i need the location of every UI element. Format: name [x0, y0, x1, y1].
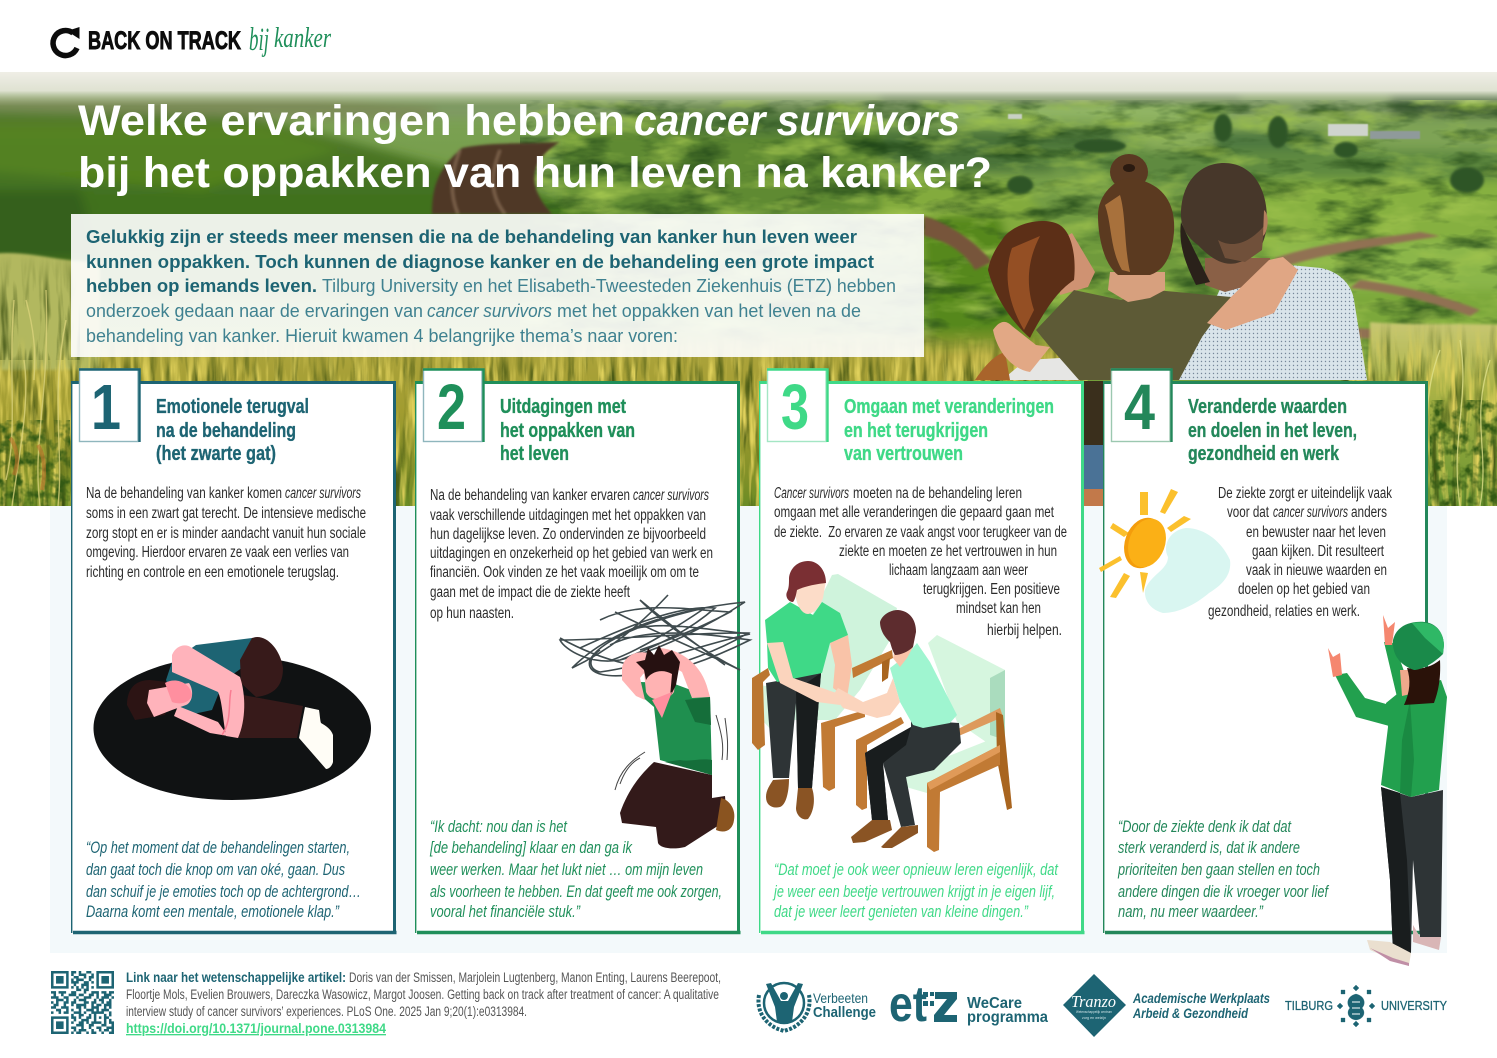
gap behind cards: clothing	[1084, 381, 1103, 506]
number 4: 4	[1124, 371, 1155, 443]
logo: Tranzo Academische Werkplaats: Wetenschappelijk centrum	[1076, 1009, 1113, 1014]
dirt road	[432, 142, 1497, 341]
reference text: interview study of cancer survivors’ experiences. PLoS One. 2025 Jan 9;20(1):e0313984.	[126, 1004, 527, 1019]
body text 1: cancer survivors	[285, 485, 361, 502]
body text 2	[430, 487, 713, 622]
heading 2: Uitdagingen met	[500, 396, 626, 418]
reference text	[126, 970, 721, 1036]
panel: introduction: Gelukkig zijn er steeds meer mensen die na de behandeling van kanker hun leven weer	[86, 227, 857, 247]
body text 3: moeten na de behandeling leren	[853, 485, 1022, 502]
logo: ETZ WeCare programma: WeCare	[967, 995, 1022, 1012]
body text 3: lichaam langzaam aan weer	[889, 562, 1028, 579]
card frame 2	[415, 381, 740, 934]
quote 2	[429, 817, 722, 921]
heading 2: het oppakken van	[500, 420, 635, 442]
heading 3: en het terugkrijgen	[844, 420, 988, 442]
logo: ETZ WeCare programma: et	[889, 976, 927, 1032]
QR code	[51, 971, 114, 1034]
logo: ETZ WeCare programma	[889, 976, 1048, 1032]
body text 2: financiën. Ook vinden ze het vaak moeilijk om om te	[430, 564, 699, 581]
panel: introduction: onderzoek gedaan naar de ervaringen van	[86, 301, 423, 321]
title: Welke ervaringen hebben	[78, 97, 625, 145]
body text 2: op hun naasten.	[430, 605, 514, 622]
panel: introduction: hebben op iemands leven.	[86, 276, 317, 296]
number 1	[79, 369, 140, 443]
quote 4: prioriteiten ben gaan stellen en toch	[1117, 860, 1320, 879]
family seen from behind	[975, 154, 1367, 380]
quote 2: vooral het financiële stuk.”	[430, 902, 581, 921]
heading 3: van vertrouwen	[844, 443, 963, 465]
quote 3: dat je weer leert genieten van kleine dingen.”	[774, 902, 1029, 921]
panel: theme 2	[415, 369, 750, 934]
panel: introduction: kunnen oppakken. Toch kunnen de diagnose kanker en de behandeling een grote impact	[86, 252, 874, 272]
quote 3: je weer een beetje vertrouwen krijgt in je eigen lijf,	[773, 882, 1055, 901]
icon: sun behind cloud	[1099, 489, 1230, 613]
number 3: 3	[781, 371, 809, 443]
heading 4: en doelen in het leven,	[1188, 420, 1357, 442]
quote 1: dan gaat toch die knop om van oké, gaan. Dus	[86, 860, 345, 879]
body text 1	[86, 485, 366, 581]
number 4	[1111, 369, 1172, 443]
body text 1: soms in een zwart gat terecht. De intensieve medische	[86, 505, 366, 522]
heading 4: gezondheid en werk	[1188, 443, 1340, 465]
body text 1: Na de behandeling van kanker komen	[86, 485, 282, 502]
logo: Tranzo Academische Werkplaats	[1063, 974, 1270, 1037]
panel: theme 4	[1099, 369, 1447, 966]
quote 4: andere dingen die ik vroeger voor lief	[1118, 882, 1330, 901]
body text 1: richting en controle en een emotionele terugslag.	[86, 564, 339, 581]
body text 3: terugkrijgen. Een positieve	[923, 581, 1060, 598]
quote 4: sterk veranderd is, dat ik andere	[1118, 838, 1300, 857]
logo: Verbeeten Challenge: Verbeeten	[813, 990, 868, 1006]
quote 4	[1117, 817, 1330, 921]
hero landscape photo	[0, 72, 1497, 520]
body text 4: voor dat	[1227, 504, 1270, 521]
card frame 3	[759, 381, 1084, 934]
body text 1: zorg stopt en er is minder aandacht vanuit hun sociale	[86, 525, 366, 542]
heading 4: Veranderde waarden	[1188, 396, 1347, 418]
illustration: woman with raised arms	[1328, 615, 1447, 966]
number 1: 1	[91, 371, 121, 443]
foreground grass	[0, 253, 1497, 520]
reference text: Floortje Mols, Evelien Brouwers, Dareczka Wasowicz, Margot Joosen. Getting back on track after treatment of cancer: A qualitative	[126, 987, 719, 1002]
farm buildings	[1008, 114, 1420, 139]
logo handwriting	[249, 22, 332, 58]
illustration: overwhelmed kneeling person with scribble	[560, 595, 750, 848]
logo: Tranzo Academische Werkplaats: Academische Werkplaats	[1132, 991, 1270, 1006]
body text 2: cancer survivors	[633, 487, 709, 504]
body text 4: cancer survivors	[1273, 504, 1348, 521]
back chair	[752, 574, 897, 791]
father	[1178, 163, 1367, 380]
quote 2: weer werken. Maar het lukt niet … om mijn leven	[430, 860, 703, 879]
body text 3: ziekte en moeten ze het vertrouwen in hun	[839, 543, 1057, 560]
body text 2: Na de behandeling van kanker ervaren	[430, 487, 630, 504]
number 3	[767, 369, 828, 443]
number 2: 2	[437, 371, 466, 443]
logo: Tranzo Academische Werkplaats: zorg en welzijn	[1082, 1015, 1106, 1020]
panel: introduction: cancer survivors	[427, 301, 552, 321]
heading 3: Omgaan met veranderingen	[844, 396, 1054, 418]
body text 3: mindset kan hen	[956, 600, 1041, 617]
body text 2: gaan met de impact die de ziekte heeft	[430, 584, 631, 601]
panel: theme 1	[71, 369, 396, 934]
panel: introduction: Tilburg University en het Elisabeth-Tweesteden Ziekenhuis (ETZ) hebben	[322, 276, 896, 296]
body text 4	[1208, 485, 1392, 620]
panel: introduction	[71, 214, 924, 357]
logo: ETZ WeCare programma: programma	[967, 1009, 1048, 1026]
quote 2: als voorheen te hebben. En dat geeft me ook zorgen,	[430, 882, 722, 901]
woman	[975, 221, 1095, 380]
body text 3: omgaan met alle veranderingen die gepaard gaan met	[774, 504, 1055, 521]
tree clumps	[1007, 114, 1484, 194]
body text 2: uitdagingen en onzekerheid op het gebied van werk en	[430, 545, 713, 562]
logo: Tilburg University	[1285, 985, 1447, 1027]
logo: Tranzo Academische Werkplaats: Tranzo	[1071, 992, 1116, 1011]
logo: Tranzo Academische Werkplaats: Arbeid & Gezondheid	[1132, 1006, 1249, 1021]
illustration: carer helping seated patient	[752, 561, 1012, 852]
body text 4: gezondheid, relaties en werk.	[1208, 603, 1360, 620]
logo handwriting: bij	[249, 22, 269, 58]
pale backdrop of the cards	[50, 506, 1447, 953]
title: bij het oppakken van hun leven na kanker?	[78, 149, 992, 197]
logo: Tilburg University: UNIVERSITY	[1381, 998, 1447, 1013]
girl	[993, 154, 1298, 380]
logo wordmark: BACK ON TRACK	[88, 27, 241, 55]
body text 4: en bewuster naar het leven	[1246, 524, 1386, 541]
reference text: Link naar het wetenschappelijke artikel:	[126, 970, 346, 985]
quote 1: dan schuif je je emoties toch op de achtergrond…	[86, 882, 361, 901]
body text 2: vaak verschillende uitdagingen met het oppakken van	[430, 507, 706, 524]
logo: Verbeeten Challenge: Challenge	[813, 1004, 876, 1021]
logo handwriting: kanker	[274, 22, 332, 54]
body text 4: doelen op het gebied van	[1238, 581, 1370, 598]
title: cancer survivors	[634, 97, 960, 145]
quote 4: nam, nu meer waardeer.”	[1118, 902, 1264, 921]
heading 3	[844, 396, 1054, 465]
reference text: https://doi.org/10.1371/journal.pone.0313984	[126, 1021, 386, 1036]
quote 2: [de behandeling] klaar en dan ga ik	[429, 838, 633, 857]
number 2	[423, 369, 484, 443]
panel: introduction: behandeling van kanker. Hieruit kwamen 4 belangrijke thema’s naar voren:	[86, 326, 678, 346]
logo: Verbeeten Challenge	[758, 983, 876, 1031]
logo: Back on Track bij kanker	[53, 22, 332, 58]
body text 4: gaan kijken. Dit resulteert	[1252, 543, 1385, 560]
quote 1	[86, 838, 361, 921]
title	[78, 97, 992, 197]
panel: introduction: met het oppakken van het leven na de	[557, 301, 861, 321]
body text 2: hun dagelijkse leven. Zo ondervinden ze bijvoorbeeld	[430, 526, 706, 543]
heading 2	[500, 396, 635, 465]
body text 1: omgeving. Hierdoor ervaren ze vaak een verlies van	[86, 544, 349, 561]
icon: circular arrow	[53, 27, 80, 56]
illustration: person curled up on black hole	[94, 637, 371, 800]
body text 4: anders	[1351, 504, 1387, 521]
heading 1: Emotionele terugval	[156, 396, 309, 418]
quote 4: “Door de ziekte denk ik dat dat	[1118, 817, 1292, 836]
quote 3	[773, 860, 1059, 921]
reference text: Doris van der Smissen, Marjolein Lugtenberg, Manon Enting, Laurens Beerepoot,	[349, 970, 721, 985]
front chair	[856, 635, 1012, 852]
body text 4: vaak in nieuwe waarden en	[1246, 562, 1387, 579]
card frame 1	[71, 381, 396, 934]
heading 2: het leven	[500, 443, 569, 465]
quote 1: Daarna komt een mentale, emotionele klap.”	[86, 902, 340, 921]
quote 1: “Op het moment dat de behandelingen starten,	[86, 838, 350, 857]
body text 3: de ziekte. Zo ervaren ze vaak angst voor terugkeer van de	[774, 524, 1067, 541]
heading 1: na de behandeling	[156, 420, 296, 442]
seated patient	[833, 610, 961, 848]
heading 1: (het zwarte gat)	[156, 443, 276, 465]
body text 3: Cancer survivors	[774, 485, 849, 502]
quote 2: “Ik dacht: nou dan is het	[430, 817, 568, 836]
heading 1	[156, 396, 309, 465]
body text 3	[774, 485, 1067, 639]
body text 4: De ziekte zorgt er uiteindelijk vaak	[1218, 485, 1392, 502]
logo: Tilburg University: TILBURG	[1285, 998, 1333, 1013]
heading 4	[1188, 396, 1357, 465]
card frame 4	[1103, 381, 1428, 934]
quote 3: “Dat moet je ook weer opnieuw leren eigenlijk, dat	[774, 860, 1059, 879]
body text 3: hierbij helpen.	[987, 622, 1062, 639]
standing carer	[765, 561, 852, 819]
panel: theme 3	[752, 369, 1084, 934]
